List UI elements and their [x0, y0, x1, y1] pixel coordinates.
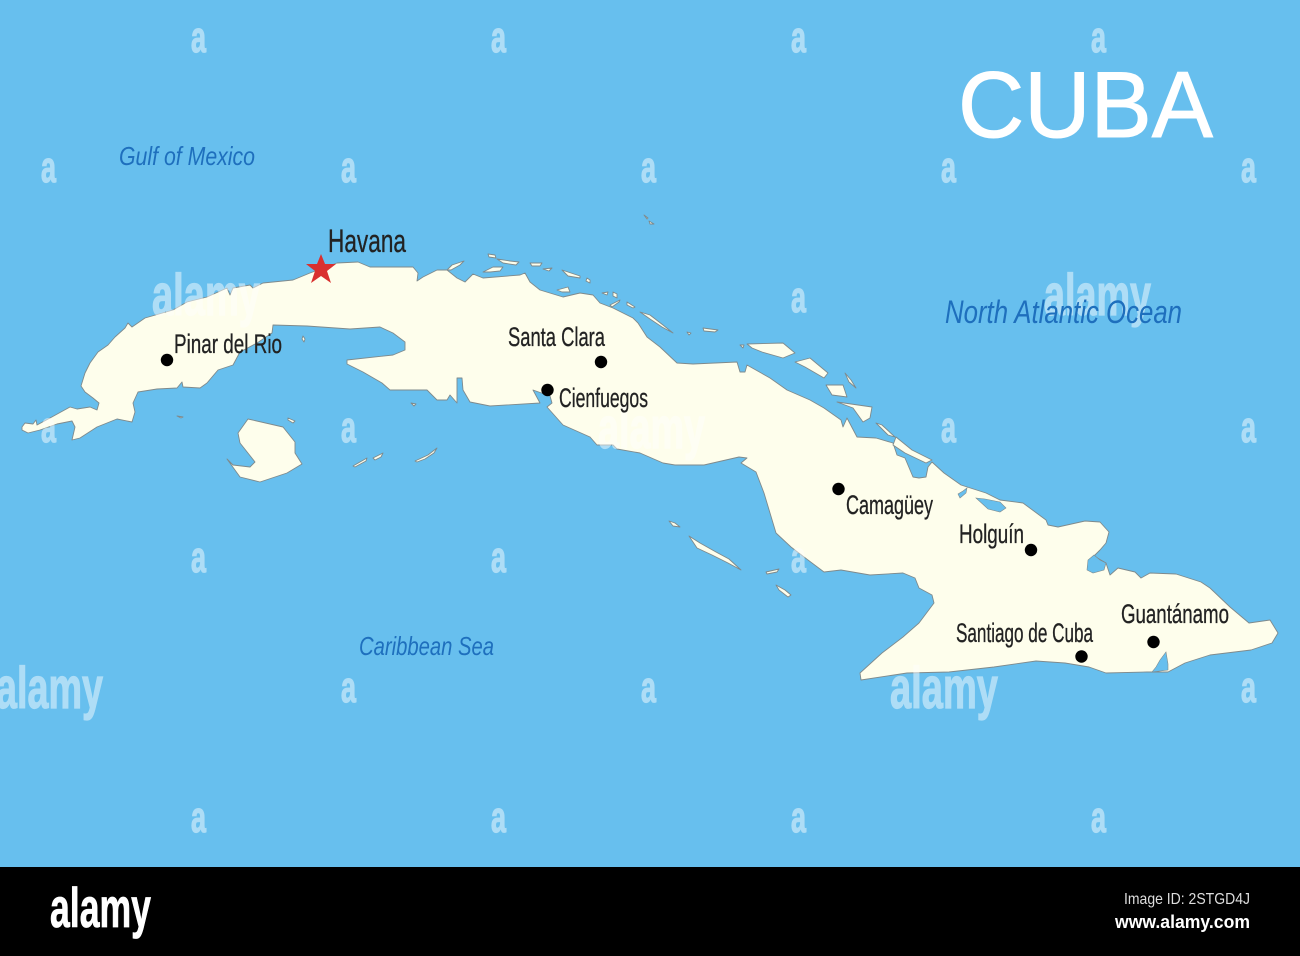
footer band — [0, 867, 1300, 956]
watermark: alamy tiles: a — [791, 533, 806, 582]
watermark: alamy tiles: a — [1241, 403, 1256, 452]
sea label: Gulf of Mexico: Gulf of Mexico — [119, 141, 255, 171]
capital marker: Havana star — [306, 254, 336, 283]
watermark: alamy tiles: alamy — [0, 656, 103, 721]
watermark: alamy tiles: alamy — [890, 656, 998, 721]
watermark: alamy tiles: a — [1241, 663, 1256, 712]
watermark: alamy tiles: alamy — [1044, 263, 1151, 328]
footer logo: alamy: alamy — [50, 876, 151, 939]
watermark: alamy tiles: a — [491, 13, 506, 62]
city: Holguín — [959, 519, 1037, 556]
sea label: Caribbean Sea: Caribbean Sea — [359, 631, 494, 661]
watermark: alamy tiles: a — [341, 403, 356, 452]
city: Pinar del Rio: Pinar del Rio — [174, 329, 282, 359]
city: Santiago de Cuba — [956, 618, 1094, 663]
watermark: alamy tiles: alamy — [152, 263, 260, 328]
watermark: alamy tiles: a — [191, 13, 206, 62]
watermark: alamy tiles: a — [41, 403, 56, 452]
sea label: North Atlantic Ocean: North Atlantic Ocean — [945, 294, 1182, 330]
watermark: alamy tiles: a — [1241, 143, 1256, 192]
city: Holguín: Holguín — [959, 519, 1024, 549]
watermark: alamy tiles: a — [641, 663, 656, 712]
watermark: alamy tiles: a — [1091, 793, 1106, 842]
watermark: alamy tiles: a — [191, 533, 206, 582]
footer: website: www.alamy.com — [1114, 912, 1250, 932]
map: main island of Cuba — [22, 262, 1278, 680]
watermark: alamy tiles: a — [341, 143, 356, 192]
watermark: alamy tiles: a — [641, 143, 656, 192]
footer: image ID: Image ID: 2STGD4J — [1124, 891, 1250, 908]
city: Camagüey: Camagüey — [846, 490, 933, 520]
city: Guantánamo — [1121, 599, 1229, 648]
watermark: alamy tiles: a — [41, 143, 56, 192]
city: Santa Clara: Santa Clara — [508, 322, 606, 352]
city: Camagüey — [832, 483, 933, 520]
watermark: alamy tiles: a — [341, 663, 356, 712]
city: Santiago de Cuba: Santiago de Cuba — [956, 618, 1094, 648]
watermark: alamy tiles: a — [191, 793, 206, 842]
city: Pinar del Rio — [161, 329, 282, 366]
watermark: alamy tiles: alamy — [598, 396, 705, 461]
city: Cienfuegos: Cienfuegos — [559, 383, 648, 413]
watermark: alamy tiles: a — [1091, 13, 1106, 62]
watermark: alamy tiles: a — [491, 533, 506, 582]
watermark: alamy tiles: a — [941, 403, 956, 452]
title: CUBA — [958, 52, 1213, 157]
watermark: alamy tiles: a — [791, 793, 806, 842]
watermark: alamy tiles: a — [791, 273, 806, 322]
city: Santa Clara — [508, 322, 607, 368]
map: Isla de la Juventud — [227, 419, 302, 482]
watermark: alamy tiles: a — [941, 143, 956, 192]
map: inland bays — [958, 488, 1168, 672]
watermark: alamy tiles: a — [491, 793, 506, 842]
watermark: alamy tiles: a — [791, 13, 806, 62]
city label: Havana: Havana — [328, 223, 406, 259]
map: northern and southern cays — [177, 215, 932, 597]
city: Cienfuegos — [541, 383, 648, 413]
city: Guantánamo: Guantánamo — [1121, 599, 1229, 629]
